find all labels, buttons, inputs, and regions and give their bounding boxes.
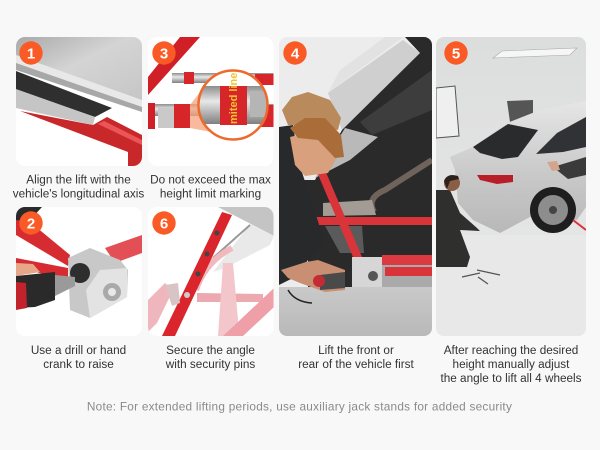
badge 5: 5 bbox=[452, 46, 460, 62]
caption step 6: with security pins bbox=[165, 358, 255, 371]
wall poster bbox=[436, 86, 459, 138]
floor bbox=[279, 287, 432, 336]
badge 3 bbox=[152, 41, 176, 65]
caption step 4: Lift the front or bbox=[318, 344, 394, 357]
grey platform bbox=[218, 207, 274, 236]
caption step 2: crank to raise bbox=[43, 358, 114, 371]
footnote: Note: For extended lifting periods, use auxiliary jack stands for added security bbox=[87, 400, 512, 414]
rear window bbox=[473, 124, 538, 159]
caption step 3: Do not exceed the max bbox=[150, 174, 271, 186]
badge 2 bbox=[19, 211, 43, 235]
drill bbox=[16, 272, 55, 308]
ceiling lamp bbox=[493, 48, 577, 58]
panel: step 5 full car bbox=[436, 37, 586, 336]
black ramp plate bbox=[16, 71, 112, 117]
caption step 1: Align the lift with the bbox=[26, 174, 131, 186]
lift platform silver bbox=[16, 37, 142, 101]
caption step 3: height limit marking bbox=[160, 188, 261, 200]
panel: step 1 align the lift bbox=[16, 37, 142, 166]
badge 6 bbox=[152, 211, 176, 235]
badge 5 bbox=[444, 41, 468, 65]
badge 4 bbox=[283, 41, 307, 65]
wheel bbox=[530, 187, 576, 233]
caption step 6: Secure the angle bbox=[166, 344, 255, 357]
wall chart bbox=[507, 100, 533, 122]
panel: step 6 security pins bbox=[148, 207, 274, 336]
red beams bbox=[313, 217, 432, 225]
lower silver plate bbox=[16, 89, 95, 125]
badge 6: 6 bbox=[160, 216, 168, 232]
badge 1 bbox=[19, 41, 43, 65]
lower rod bbox=[148, 104, 274, 116]
badge 3: 3 bbox=[160, 46, 168, 62]
side window bbox=[536, 117, 586, 154]
red beams bbox=[16, 220, 70, 266]
kneeling mechanic bbox=[436, 175, 480, 267]
caption step 5: height manually adjust bbox=[453, 358, 570, 371]
red strut bbox=[573, 220, 586, 230]
upper rod bbox=[172, 73, 274, 83]
panel: step 4 lifting bbox=[279, 37, 432, 336]
caption step 5: After reaching the desired bbox=[444, 344, 578, 357]
red diagonal beam bbox=[148, 37, 200, 95]
exhaust pipe bbox=[372, 160, 432, 212]
badge 2: 2 bbox=[27, 216, 35, 232]
car sill bbox=[328, 40, 420, 130]
underbody bbox=[304, 37, 432, 257]
badge 4: 4 bbox=[291, 46, 300, 62]
gear unit bbox=[352, 257, 382, 287]
panel: step 3 height limit bbox=[148, 37, 274, 141]
mechanic bbox=[279, 92, 345, 303]
infographic bbox=[12, 37, 586, 413]
second mechanic arm bbox=[553, 157, 586, 179]
tail light bbox=[477, 175, 513, 184]
caption step 2: Use a drill or hand bbox=[31, 344, 126, 357]
tools on floor bbox=[462, 270, 500, 284]
pins bbox=[214, 230, 220, 236]
badge 1: 1 bbox=[27, 46, 35, 62]
red strut bbox=[162, 212, 232, 336]
caption step 4: rear of the vehicle first bbox=[298, 358, 415, 371]
panel: step 2 drill bbox=[16, 207, 142, 318]
car body bbox=[450, 101, 586, 233]
zoom cone bbox=[190, 93, 210, 132]
gearbox bbox=[68, 248, 128, 318]
magnified view: mited line bbox=[228, 73, 240, 124]
pink struts bbox=[148, 283, 170, 331]
top dark corner bbox=[16, 207, 42, 220]
hand bbox=[16, 263, 40, 276]
red beam bbox=[20, 111, 142, 166]
caption step 1: vehicle's longitudinal axis bbox=[13, 188, 144, 200]
caption step 5: the angle to lift all 4 wheels bbox=[440, 372, 582, 385]
